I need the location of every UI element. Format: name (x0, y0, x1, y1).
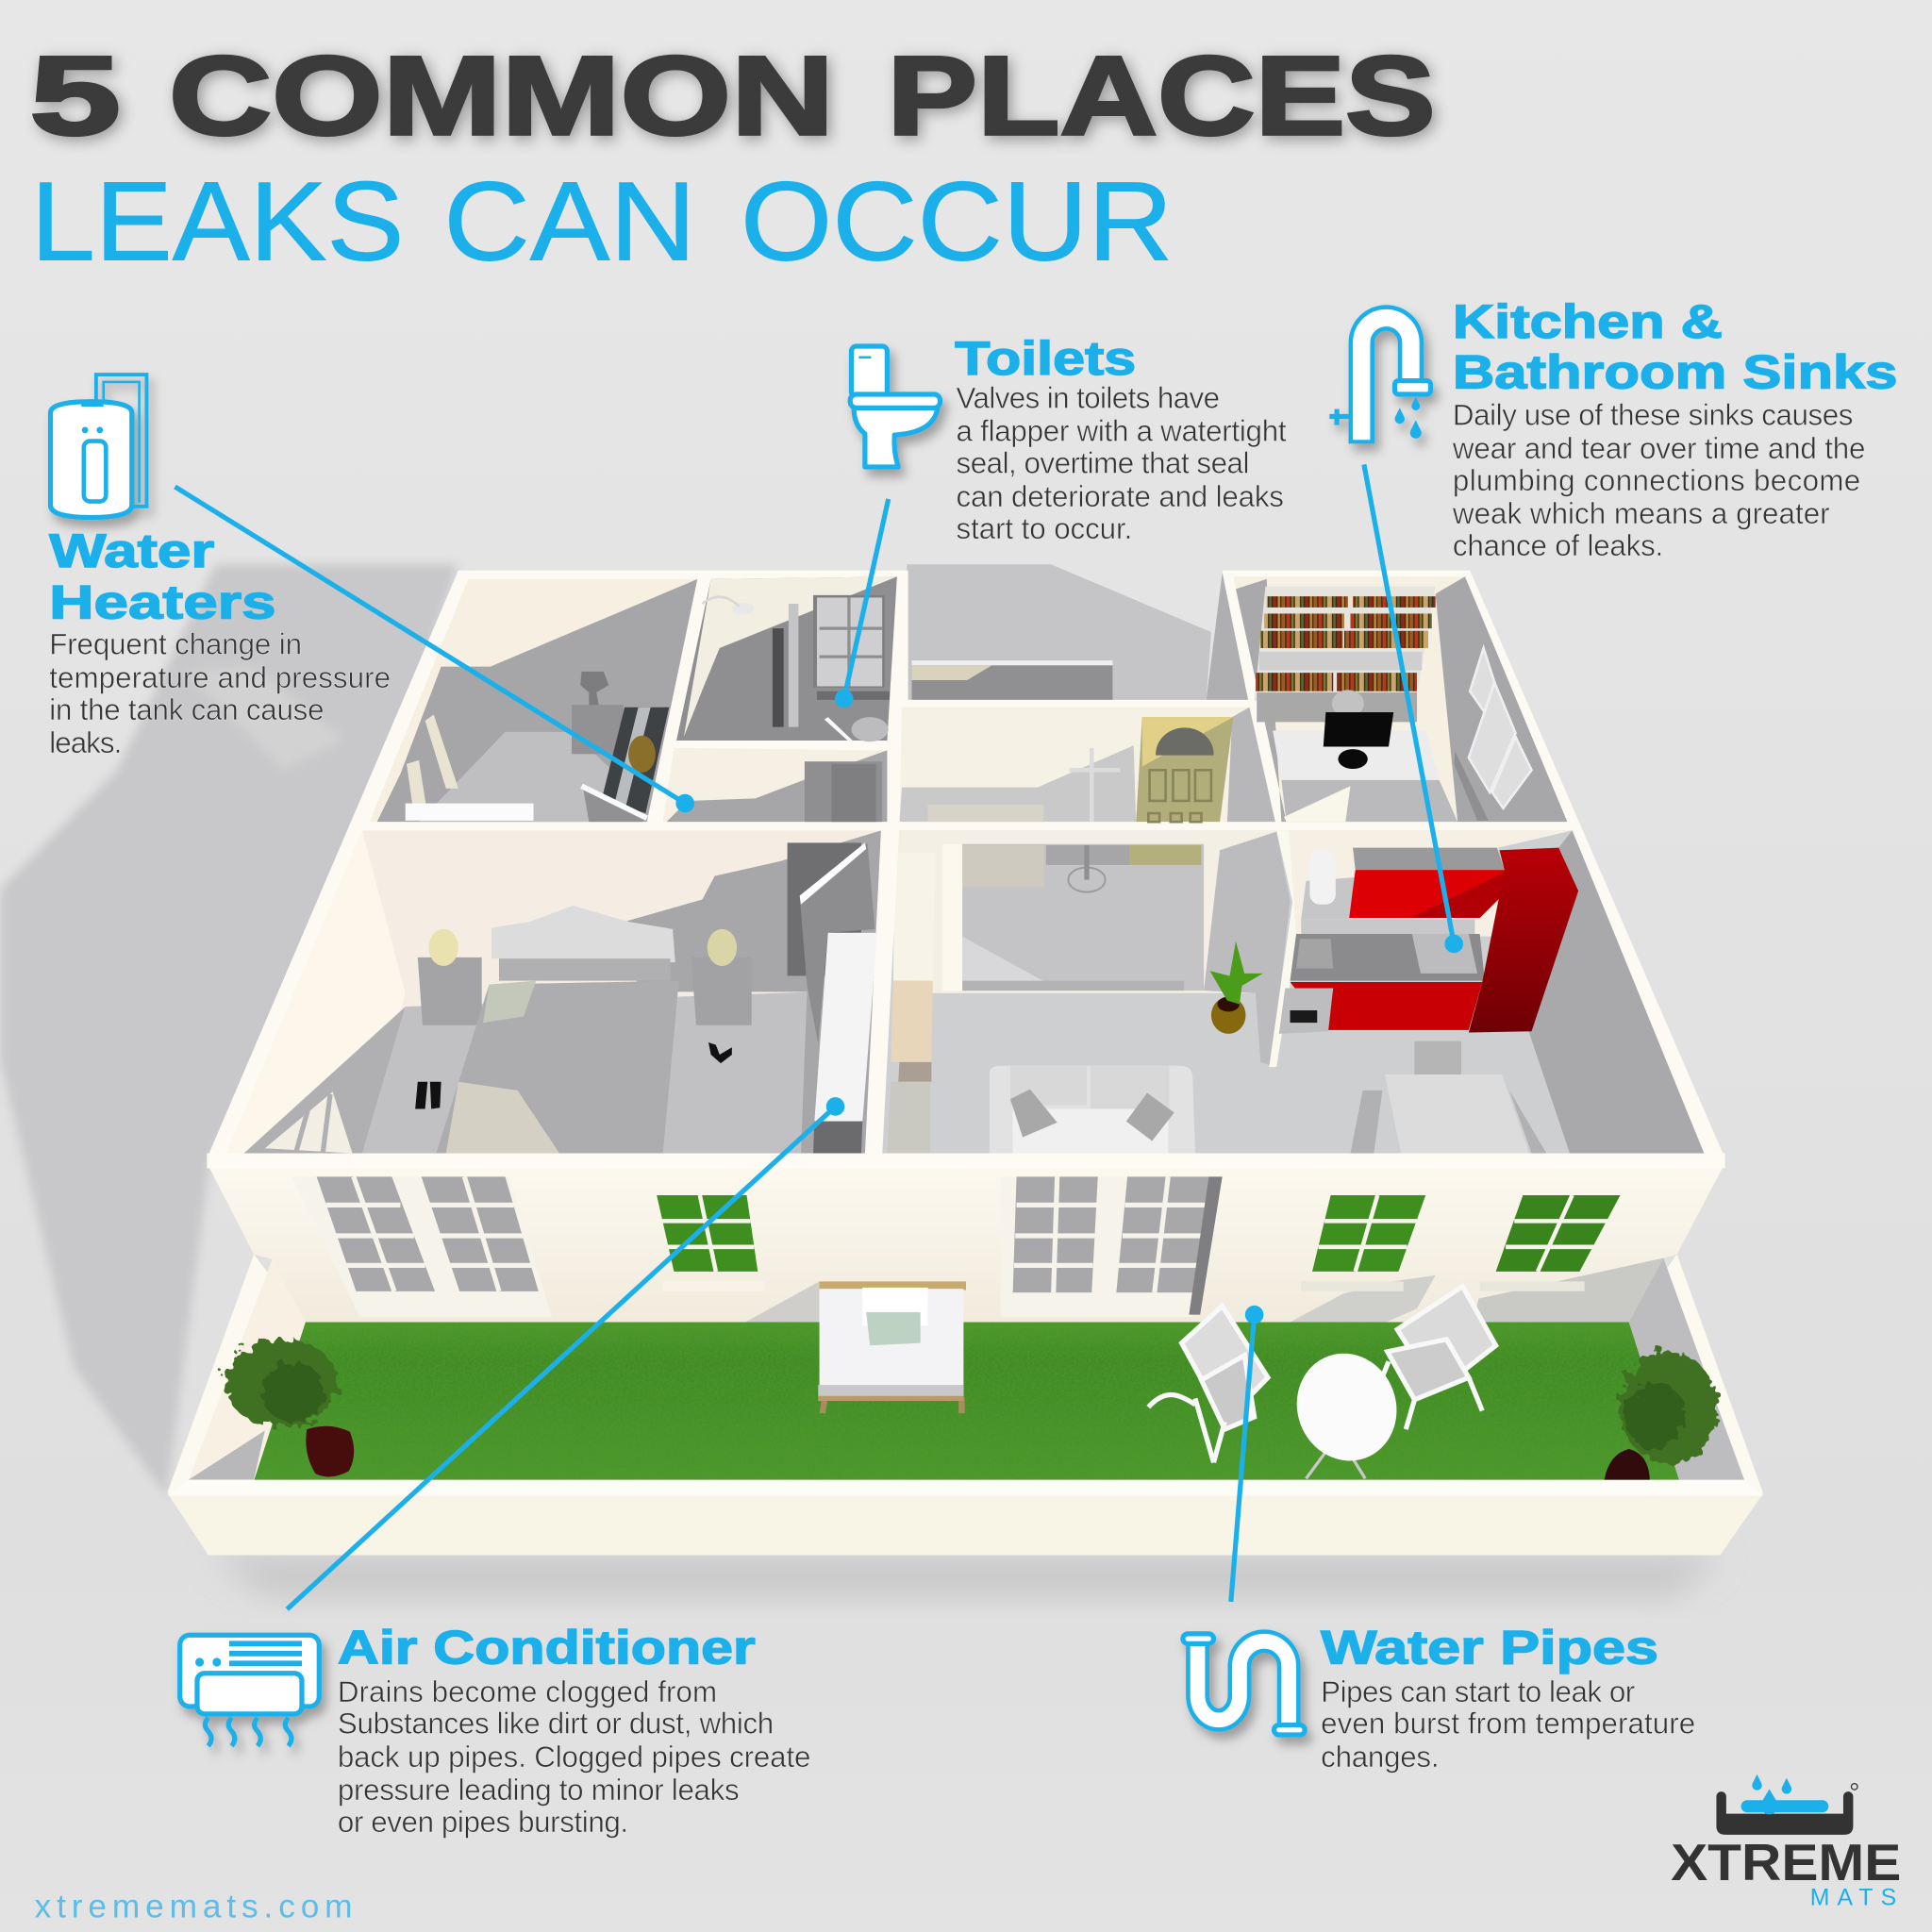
living back wall (894, 830, 1276, 993)
right wall (1436, 576, 1567, 822)
room: bathroom (676, 576, 897, 741)
window middle (1301, 1195, 1425, 1291)
terrace (168, 1255, 1763, 1555)
text: air conditioner: or even pipes bursting. (338, 1806, 628, 1839)
text: sinks (1452, 399, 1865, 562)
low wall behind hall (912, 660, 1112, 700)
tree left (225, 1338, 354, 1476)
logo: Xtreme Mats: MATS (1810, 1885, 1896, 1910)
heading: sinks: Bathroom Sinks (1453, 345, 1897, 398)
room: office with bookshelf (1233, 576, 1567, 822)
terrace right inner wall (1629, 1258, 1744, 1481)
heading: air conditioner: Air Conditioner (338, 1621, 756, 1674)
shoes (415, 1082, 441, 1109)
counter (1291, 934, 1485, 981)
terrace left inner wall (189, 1259, 306, 1480)
wall between bedroom and living room (865, 823, 899, 1156)
nightstand and lamp (572, 672, 624, 754)
partition wall (1204, 830, 1304, 1067)
text: toilets: can deteriorate and leaks (957, 480, 1284, 513)
house ground shadow (0, 564, 1720, 1597)
leader: water heaters (175, 487, 694, 812)
oven (1279, 989, 1333, 1034)
title line 2: OCCUR (741, 159, 1173, 285)
small bed (601, 708, 669, 813)
text: air conditioner: pressure leading to minor leaks (338, 1774, 740, 1807)
leader: air conditioner (287, 1097, 844, 1609)
room: upper left bedroom (370, 579, 697, 822)
icon: water heater (51, 375, 146, 518)
title line 2: CAN (443, 159, 696, 285)
house top wall plan (207, 571, 1725, 1158)
sofa (990, 1066, 1195, 1154)
text: sinks: Daily use of these sinks causes (1453, 399, 1853, 432)
dining table (1351, 1041, 1546, 1154)
chair left (1148, 1306, 1268, 1462)
bed (436, 906, 679, 1154)
chair right (1380, 1287, 1496, 1429)
lower cabinets (1291, 982, 1482, 1030)
room: entry hall (899, 708, 1275, 822)
front door (1136, 717, 1233, 822)
leader: water pipes (1231, 1306, 1263, 1602)
leader: sinks (1364, 464, 1463, 953)
text: water heaters (49, 628, 391, 759)
stove (1296, 939, 1333, 969)
side windows (1469, 648, 1532, 808)
logo: Xtreme Mats (1671, 1774, 1901, 1910)
lawn (254, 1322, 1679, 1481)
text: water pipes (1321, 1675, 1695, 1774)
text: water pipes: Pipes can start to leak or (1321, 1675, 1635, 1708)
text: toilets: start to occur. (957, 512, 1132, 545)
heading: toilets: Toilets (955, 332, 1136, 385)
text: air conditioner: Drains become clogged from (338, 1675, 717, 1708)
left shelf (887, 853, 935, 1154)
icon: water pipe (1183, 1634, 1305, 1735)
window left (657, 1195, 765, 1291)
text: air conditioner (338, 1675, 810, 1839)
low wall front face (168, 1480, 1763, 1555)
kitchen back wall (1289, 830, 1573, 937)
text: sinks: plumbing connections become (1453, 464, 1860, 497)
left nightstand (418, 958, 482, 1025)
upper cabinets (1349, 848, 1505, 918)
monitor (1324, 712, 1393, 769)
heading: water pipes: Water Pipes (1321, 1621, 1658, 1674)
title line 2: LEAKS (31, 159, 404, 285)
title line 1: 5 (29, 33, 121, 158)
opening to hall (962, 844, 1204, 991)
room: living room and kitchen (882, 830, 1704, 1154)
sink (1412, 934, 1477, 974)
text: water pipes: changes. (1321, 1740, 1440, 1774)
title line 1: PLACES (887, 33, 1436, 158)
text: water pipes: even burst from temperature (1321, 1707, 1695, 1740)
wall shelf and water tank (1301, 850, 1356, 919)
window (817, 597, 882, 687)
daybed (745, 1281, 966, 1413)
icon: faucet (1329, 318, 1430, 443)
room: master bedroom (226, 830, 881, 1154)
leader: toilets (835, 499, 889, 708)
terrace walls (168, 1255, 1763, 1555)
text: toilets: a flapper with a watertight (957, 415, 1287, 448)
title line 1 (29, 33, 1436, 158)
tree right (1605, 1352, 1718, 1480)
text: water heaters: Frequent change in (49, 628, 302, 661)
plant (1210, 941, 1263, 1034)
heading: sinks: Kitchen & (1453, 295, 1723, 348)
text: air conditioner: back up pipes. Clogged pipes create (338, 1740, 810, 1774)
desk (1273, 731, 1440, 780)
bookshelf (1255, 587, 1436, 722)
heading: sinks (1453, 295, 1897, 398)
room: small utility room (663, 748, 887, 822)
closet door (788, 842, 874, 1043)
window right (1480, 1195, 1621, 1291)
text: sinks: chance of leaks. (1453, 529, 1663, 562)
text: toilets: Valves in toilets have (957, 381, 1220, 414)
kitchen right wall (1528, 830, 1704, 1154)
text: sinks: wear and tear over time and the (1452, 432, 1865, 465)
website url: xtrememats.com (35, 1888, 353, 1924)
title line 2 (31, 159, 1173, 285)
title line 1: COMMON (169, 33, 834, 158)
text: water heaters: temperature and pressure (49, 661, 391, 694)
text: toilets: seal, overtime that seal (957, 447, 1249, 480)
text: sinks: weak which means a greater (1452, 497, 1830, 530)
text: air conditioner: Substances like dirt or dust, which (338, 1707, 774, 1740)
text: toilets (957, 381, 1287, 545)
round table (1282, 1340, 1411, 1478)
right nightstand (691, 958, 752, 1025)
french doors left (292, 1176, 552, 1317)
text: water heaters: leaks. (49, 726, 122, 759)
heading: water heaters: Heaters (49, 576, 276, 629)
icon: air conditioner (180, 1635, 319, 1746)
wardrobe (813, 933, 877, 1154)
heading: water heaters (49, 525, 276, 629)
fridge (1469, 848, 1578, 1033)
heading: water heaters: Water (49, 525, 214, 577)
lamps (429, 929, 737, 966)
text: water heaters: in the tank can cause (49, 693, 325, 726)
icon: toilet (850, 346, 941, 467)
front wall with windows (207, 1154, 1725, 1322)
french doors right (1001, 1176, 1223, 1317)
logo: Xtreme Mats: XTREME (1671, 1833, 1901, 1891)
